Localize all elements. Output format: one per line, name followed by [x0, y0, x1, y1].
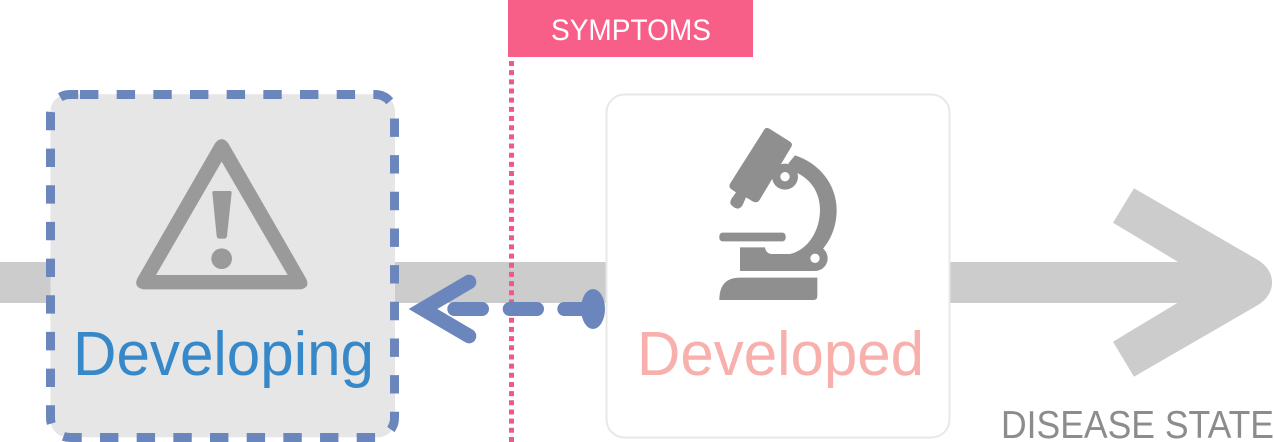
arrow: dashed blue reverse arrow [423, 282, 605, 336]
dashed panel border [50, 94, 394, 438]
symptoms banner [508, 0, 753, 57]
label: developing: Developing [73, 319, 374, 389]
banner label: SYMPTOMS [551, 14, 711, 47]
label: developed: Developed [637, 319, 924, 389]
symptoms dotted line [509, 61, 514, 442]
panel outline [606, 94, 950, 438]
arrow: disease state timeline [0, 188, 1272, 377]
panel background [50, 94, 395, 437]
panel: developed [606, 94, 950, 438]
icon: microscope [719, 128, 837, 300]
icon: warning triangle [136, 139, 307, 289]
panel: developing [50, 94, 395, 438]
